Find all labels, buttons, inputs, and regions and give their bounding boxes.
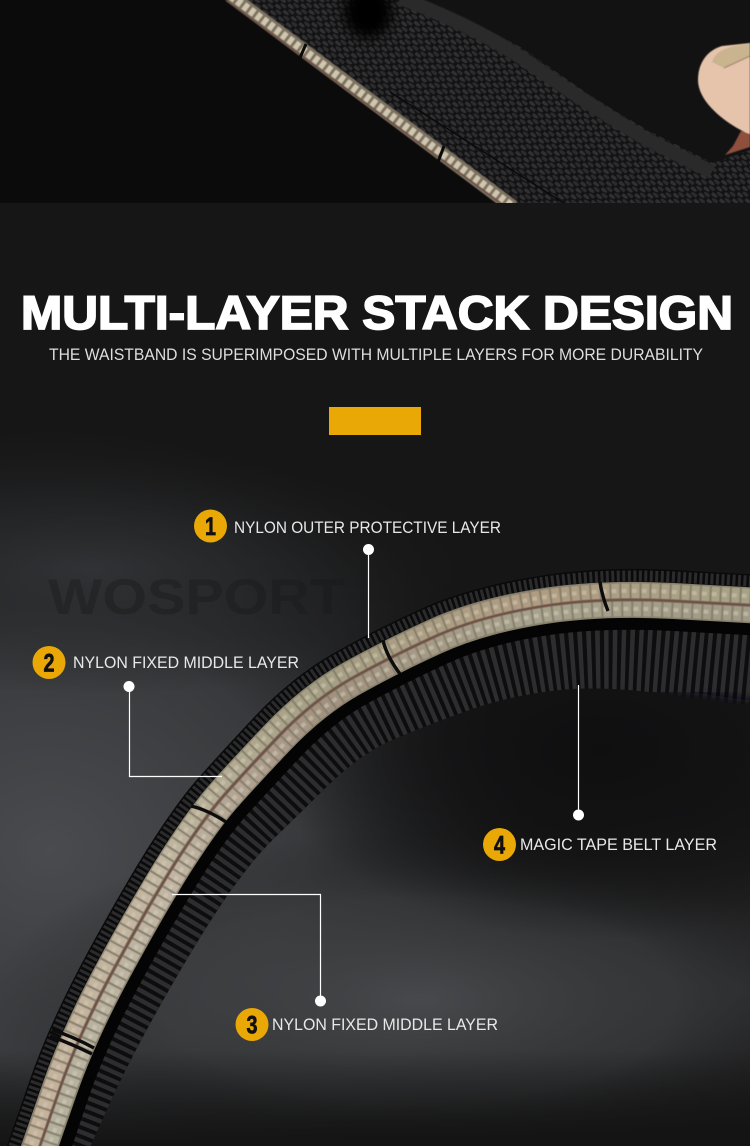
belt cross-section <box>0 560 750 1146</box>
callout 4: magic tape belt layer <box>483 685 717 861</box>
badge 3: 3 <box>246 1012 258 1040</box>
woven belt band <box>232 0 750 203</box>
badge 1 <box>194 510 227 542</box>
label 4: MAGIC TAPE BELT LAYER <box>520 836 717 854</box>
rope centre seam <box>26 600 750 1146</box>
woven edge strip <box>400 0 712 172</box>
label 1: NYLON OUTER PROTECTIVE LAYER <box>234 519 501 537</box>
badge 1: 1 <box>205 513 216 541</box>
callout 3: nylon fixed middle layer <box>172 894 498 1041</box>
leader line 4 <box>573 685 584 820</box>
title: MULTI-LAYER STACK DESIGN <box>21 286 733 339</box>
leader line 3 <box>172 894 326 1006</box>
label 2: NYLON FIXED MIDDLE LAYER <box>73 654 299 672</box>
badge 2: 2 <box>44 650 54 678</box>
outer webbing layer <box>3 576 750 1146</box>
rope stitches <box>299 44 444 162</box>
belt seam <box>390 92 565 204</box>
callout 1: nylon outer protective layer <box>194 510 501 638</box>
badge 2 <box>32 646 66 679</box>
inner magic tape layer <box>72 630 750 1146</box>
bar tack stitches <box>50 582 608 1054</box>
finger <box>698 43 750 155</box>
rope base <box>26 600 750 1146</box>
shadow blob <box>344 0 392 38</box>
badge 4 <box>483 828 516 861</box>
label 3: NYLON FIXED MIDDLE LAYER <box>272 1016 498 1034</box>
callout 2: nylon fixed middle layer <box>32 646 299 776</box>
badge 3 <box>236 1008 268 1041</box>
badge 4: 4 <box>494 832 505 860</box>
top photo: belt close-up with finger <box>0 0 750 207</box>
black gap <box>50 623 750 1146</box>
rope strip <box>226 0 513 207</box>
watermark logo: WOSPORT <box>48 569 345 625</box>
subtitle: THE WAISTBAND IS SUPERIMPOSED WITH MULTIPLE LAYERS FOR MORE DURABILITY <box>49 346 703 364</box>
leader line 2 <box>124 681 222 776</box>
leader line 1 <box>363 544 374 638</box>
velcro fuzz area <box>385 0 750 203</box>
accent bar <box>329 407 421 435</box>
rope inner strand <box>34 609 750 1146</box>
rope outer strand <box>18 591 750 1146</box>
